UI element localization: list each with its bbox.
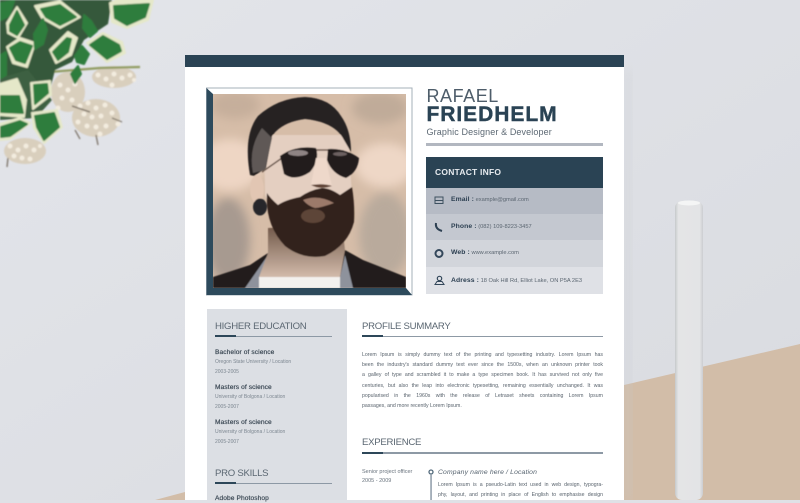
beard: [267, 187, 354, 257]
profile summary text: a galley of type and scrambled it to make a type specimen book. It has survived not only five: [362, 372, 603, 378]
profile summary text: been the industry's standard dummy text ever since the 1500s, when an unknown printer took: [362, 362, 603, 368]
contact row: address: [426, 267, 603, 294]
heading: pro skills: PRO SKILLS: [215, 468, 268, 479]
glass rod: [675, 200, 703, 500]
contact row: phone: [426, 214, 603, 240]
contact row: email: [426, 188, 603, 214]
contact row: web: [426, 240, 603, 267]
heading: profile summary: PROFILE SUMMARY: [362, 321, 451, 332]
experience entry: phy, layout, and printing in place of English to emphasise design: [438, 492, 603, 498]
ear gauge: [253, 198, 267, 216]
education entry 3: Masters of science: [215, 419, 272, 426]
experience role and dates: Senior project officer: [362, 469, 412, 475]
experience entry: [438, 469, 603, 498]
education entry 2: Masters of science: [215, 384, 272, 391]
hair: [248, 97, 351, 176]
experience entry: Lorem Ipsum is a pseudo-Latin text used in web design, typogra-: [438, 482, 603, 488]
sunglasses: [262, 150, 328, 172]
education entry 2: [215, 384, 285, 410]
experience role and dates: [362, 469, 412, 484]
header bar: [185, 55, 624, 67]
skill label: Adobe Photoshop: [215, 495, 269, 502]
name: Friedhelm: FRIEDHELM: [426, 103, 558, 126]
jacket: [213, 250, 406, 288]
kraft paper: [624, 344, 800, 500]
neck: [259, 225, 345, 277]
timeline: [428, 469, 434, 500]
education entry 2: 2005-2007: [215, 404, 239, 410]
education entry 2: University of Bolgona / Location: [215, 394, 285, 400]
panel: resume page: [185, 55, 624, 500]
contact row: email: Email : example@gmail.com: [451, 196, 529, 203]
profile summary text: Lorem Ipsum is simply dummy text of the printing and typesetting industry. Lorem Ipsum has: [362, 352, 603, 358]
page shadow: [624, 70, 632, 500]
flowers: [4, 66, 136, 164]
profile summary text: [362, 352, 603, 409]
contact row: web: Web : www.example.com: [451, 249, 519, 256]
heading: higher education: HIGHER EDUCATION: [215, 321, 306, 332]
profile summary text: passages, and more recently Lorem Ipsum.: [362, 403, 462, 409]
panel: contact info: [426, 157, 603, 294]
face: [264, 134, 352, 206]
photo frame: [206, 88, 412, 296]
contact heading: CONTACT INFO: [435, 167, 501, 177]
leaves with cream edges: [0, 0, 153, 143]
education entry 3: University of Bolgona / Location: [215, 429, 285, 435]
profile summary text: popularised in the 1960s with the release of Letraset sheets containing Lorem Ipsum: [362, 393, 603, 399]
education entry 1: Oregon State University / Location: [215, 359, 291, 365]
job title: Graphic Designer & Developer: [426, 127, 552, 137]
icon: plant decoration: [0, 0, 154, 168]
name: Rafael: RAFAEL: [426, 86, 499, 106]
profile summary text: centuries, but also the leap into electronic typesetting, remaining essentially unchanged. It was: [362, 383, 603, 389]
contact heading: [426, 157, 603, 188]
portrait photo: [213, 94, 406, 288]
nose: [312, 157, 331, 185]
dark foliage shadow: [0, 0, 112, 98]
education entry 1: Bachelor of science: [215, 349, 274, 356]
contact row: address: Adress : 18 Oak Hill Rd, Elliot Lake, ON P5A 2E3: [451, 277, 582, 284]
heading: experience: EXPERIENCE: [362, 437, 421, 448]
experience entry: Company name here / Location: [438, 469, 537, 476]
panel: left sidebar: [207, 309, 347, 500]
education entry 1: 2003-2005: [215, 368, 239, 374]
education entry 3: [215, 419, 285, 444]
education entry 1: [215, 349, 291, 374]
contact row: phone: Phone : (082) 109-8223-3457: [451, 222, 532, 230]
experience role and dates: 2005 - 2009: [362, 478, 391, 484]
education entry 3: 2005-2007: [215, 438, 239, 444]
